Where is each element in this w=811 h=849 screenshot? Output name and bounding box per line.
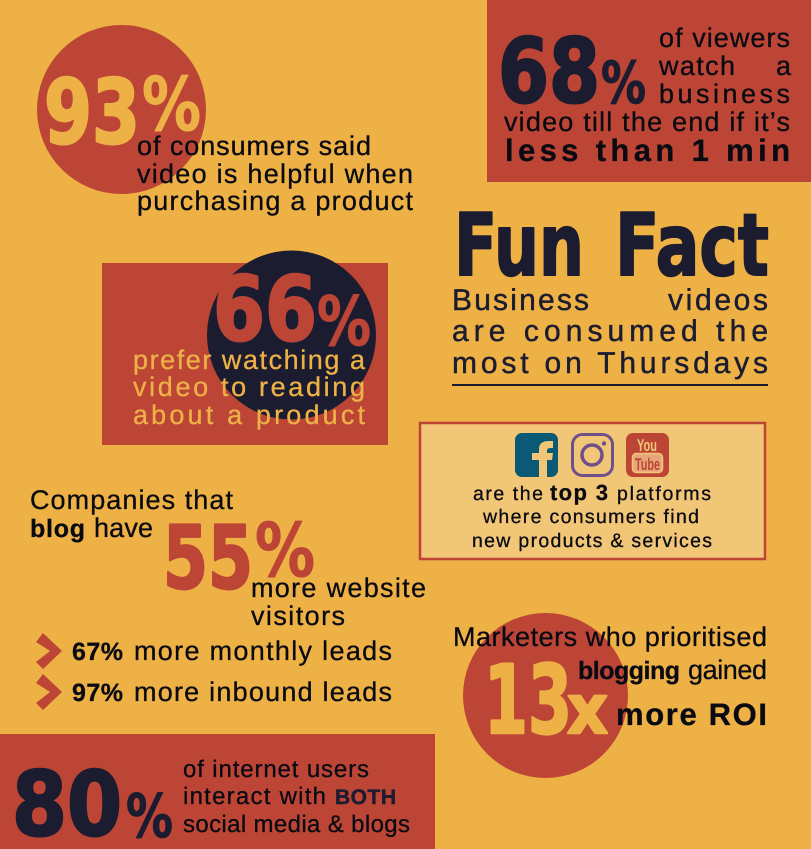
circle: 66% background bbox=[207, 250, 376, 420]
text: more website visitors: more website bbox=[251, 573, 426, 603]
panel background bbox=[102, 263, 388, 445]
text: 80% description: of internet users bbox=[183, 756, 369, 783]
text: 93% description bbox=[137, 131, 413, 216]
text: companies that blog have: blog bbox=[30, 515, 85, 543]
text: Fun Fact description bbox=[452, 284, 768, 386]
text: Fun Fact description: Business bbox=[452, 284, 589, 317]
symbol: percent: % bbox=[142, 62, 201, 148]
text: 93% description: purchasing a product bbox=[137, 186, 413, 216]
symbol: x: x bbox=[567, 671, 608, 750]
icon: YouTube: You bbox=[637, 436, 657, 455]
icon: Instagram bbox=[572, 434, 612, 476]
text: platforms description bbox=[472, 480, 712, 552]
text: 93% description: of consumers said bbox=[137, 131, 371, 161]
number: 55: 55 bbox=[163, 507, 253, 609]
panel: 80% stat bbox=[0, 734, 435, 849]
heading: Fun Fact: Fun bbox=[454, 196, 584, 296]
text: companies that blog have: Companies that bbox=[30, 485, 233, 515]
text: 97%: 97% bbox=[72, 679, 123, 707]
text: 68% description: watch bbox=[658, 51, 735, 81]
icon: YouTube bbox=[626, 433, 669, 477]
text: 68% description: business bbox=[659, 79, 790, 109]
text: platforms description: new products & services bbox=[472, 530, 712, 552]
symbol: percent: % bbox=[255, 508, 315, 594]
number: 13: 13 bbox=[484, 646, 572, 756]
list item: 97% more inbound leads bbox=[36, 674, 392, 710]
heading: Fun Fact bbox=[454, 196, 769, 296]
text: ROI description: more ROI bbox=[616, 697, 767, 732]
list item: 67% more monthly leads: more monthly leads bbox=[134, 636, 392, 666]
text: ROI description: blogging bbox=[578, 657, 680, 685]
list item: 67% more monthly leads bbox=[36, 633, 392, 669]
text: 68% description: video till the end if it’s bbox=[504, 107, 790, 137]
text: platforms description: where consumers find bbox=[482, 506, 699, 528]
text: ROI description: gained bbox=[688, 655, 767, 685]
circle: 13x background bbox=[463, 613, 628, 778]
text: 68% description bbox=[504, 23, 792, 168]
text: 66% description: video to reading bbox=[133, 372, 365, 402]
text: companies that blog have bbox=[30, 485, 233, 543]
text: 66% description bbox=[133, 345, 366, 430]
symbol: percent: % bbox=[317, 283, 371, 362]
panel: 55% blog stat bbox=[30, 485, 426, 631]
icon: chevron bbox=[36, 633, 62, 669]
text: more website visitors: visitors bbox=[251, 601, 345, 631]
circle: 93% background bbox=[37, 25, 206, 194]
text: Fun Fact description: are consumed the bbox=[452, 315, 768, 348]
text: platforms description: top 3 bbox=[550, 480, 608, 505]
list item: 97% more inbound leads: more inbound leads bbox=[134, 677, 392, 707]
panel background bbox=[420, 423, 765, 559]
text: 80% description: interact with bbox=[183, 783, 326, 810]
text: 66% description: prefer watching a bbox=[133, 345, 366, 375]
text: 80% description: BOTH bbox=[335, 786, 396, 809]
text: platforms description: platforms bbox=[617, 483, 711, 505]
icon: chevron bbox=[36, 674, 62, 710]
text: ROI description: Marketers who prioritised bbox=[453, 622, 767, 652]
text: ROI description bbox=[453, 622, 767, 732]
panel: 66% stat bbox=[102, 250, 388, 445]
panel: top 3 platforms bbox=[420, 423, 765, 559]
text: Fun Fact description: most on Thursdays bbox=[452, 347, 768, 380]
text: 80% description: social media & blogs bbox=[183, 811, 410, 838]
text: 68% description: less than 1 min bbox=[505, 133, 790, 168]
text: 93% description: video is helpful when bbox=[137, 159, 413, 189]
text: more website visitors bbox=[251, 573, 426, 631]
icon: YouTube: Tube bbox=[635, 455, 660, 474]
number: 68: 68 bbox=[498, 19, 600, 123]
text: 68% description: of viewers bbox=[659, 23, 790, 53]
panel: 68% stat bbox=[487, 0, 811, 182]
number: 93: 93 bbox=[44, 60, 140, 164]
panel background bbox=[0, 734, 435, 849]
text: platforms description: are the bbox=[473, 483, 543, 505]
panel: 93% stat bbox=[37, 25, 413, 216]
text: 66% description: about a product bbox=[133, 400, 365, 430]
text: Fun Fact description: videos bbox=[668, 284, 768, 317]
text: 67%: 67% bbox=[72, 638, 123, 666]
text: 68% description: a bbox=[776, 51, 792, 81]
text: 80% description bbox=[183, 756, 410, 838]
number: 66: 66 bbox=[213, 257, 317, 361]
panel: 13x ROI stat bbox=[453, 613, 767, 778]
panel background bbox=[487, 0, 811, 182]
icon: Facebook bbox=[515, 433, 558, 477]
symbol: percent: % bbox=[601, 49, 646, 117]
text: companies that blog have: have bbox=[94, 513, 153, 543]
